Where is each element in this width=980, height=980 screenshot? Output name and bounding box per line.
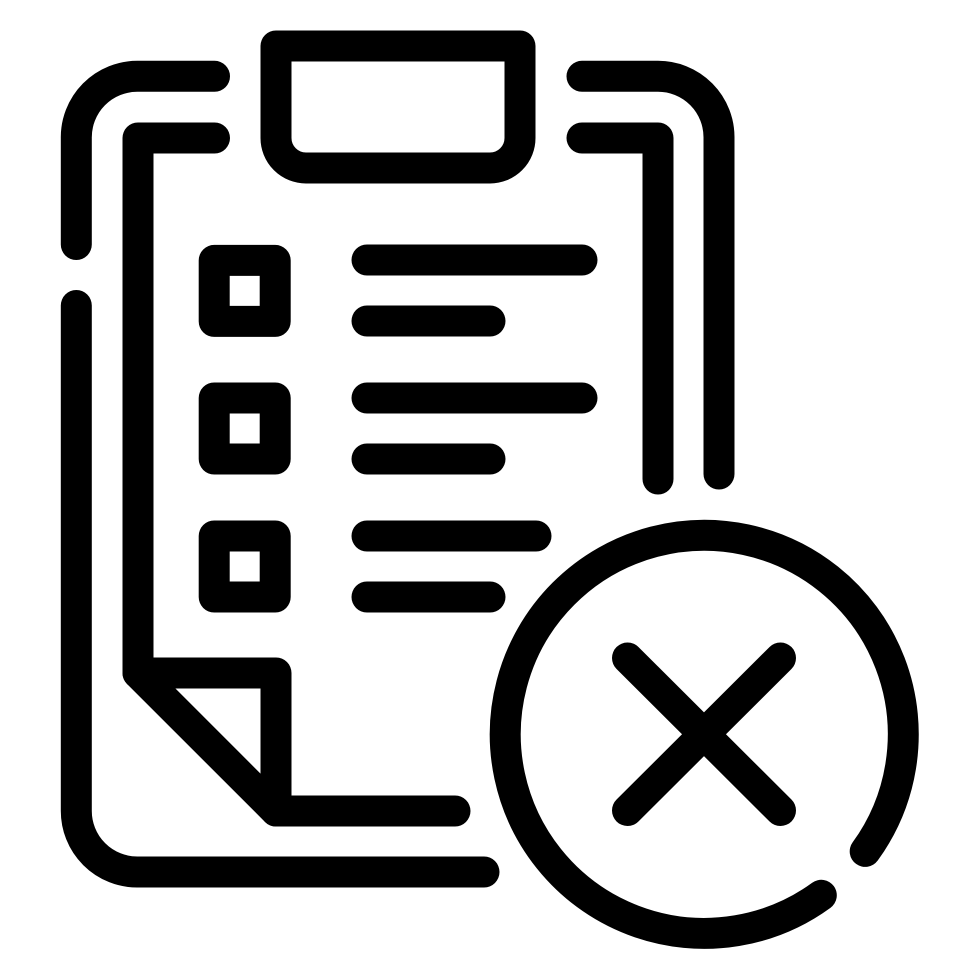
cross mark (628, 658, 780, 810)
checklist row 3 (214, 536, 536, 597)
checklist row 1 (214, 260, 582, 321)
clipboard clip (276, 46, 520, 168)
paper sheet with folded corner (138, 138, 658, 811)
clipboard outer board (76, 76, 719, 872)
rejection circle (505, 535, 903, 933)
checklist row 2 (214, 398, 582, 459)
